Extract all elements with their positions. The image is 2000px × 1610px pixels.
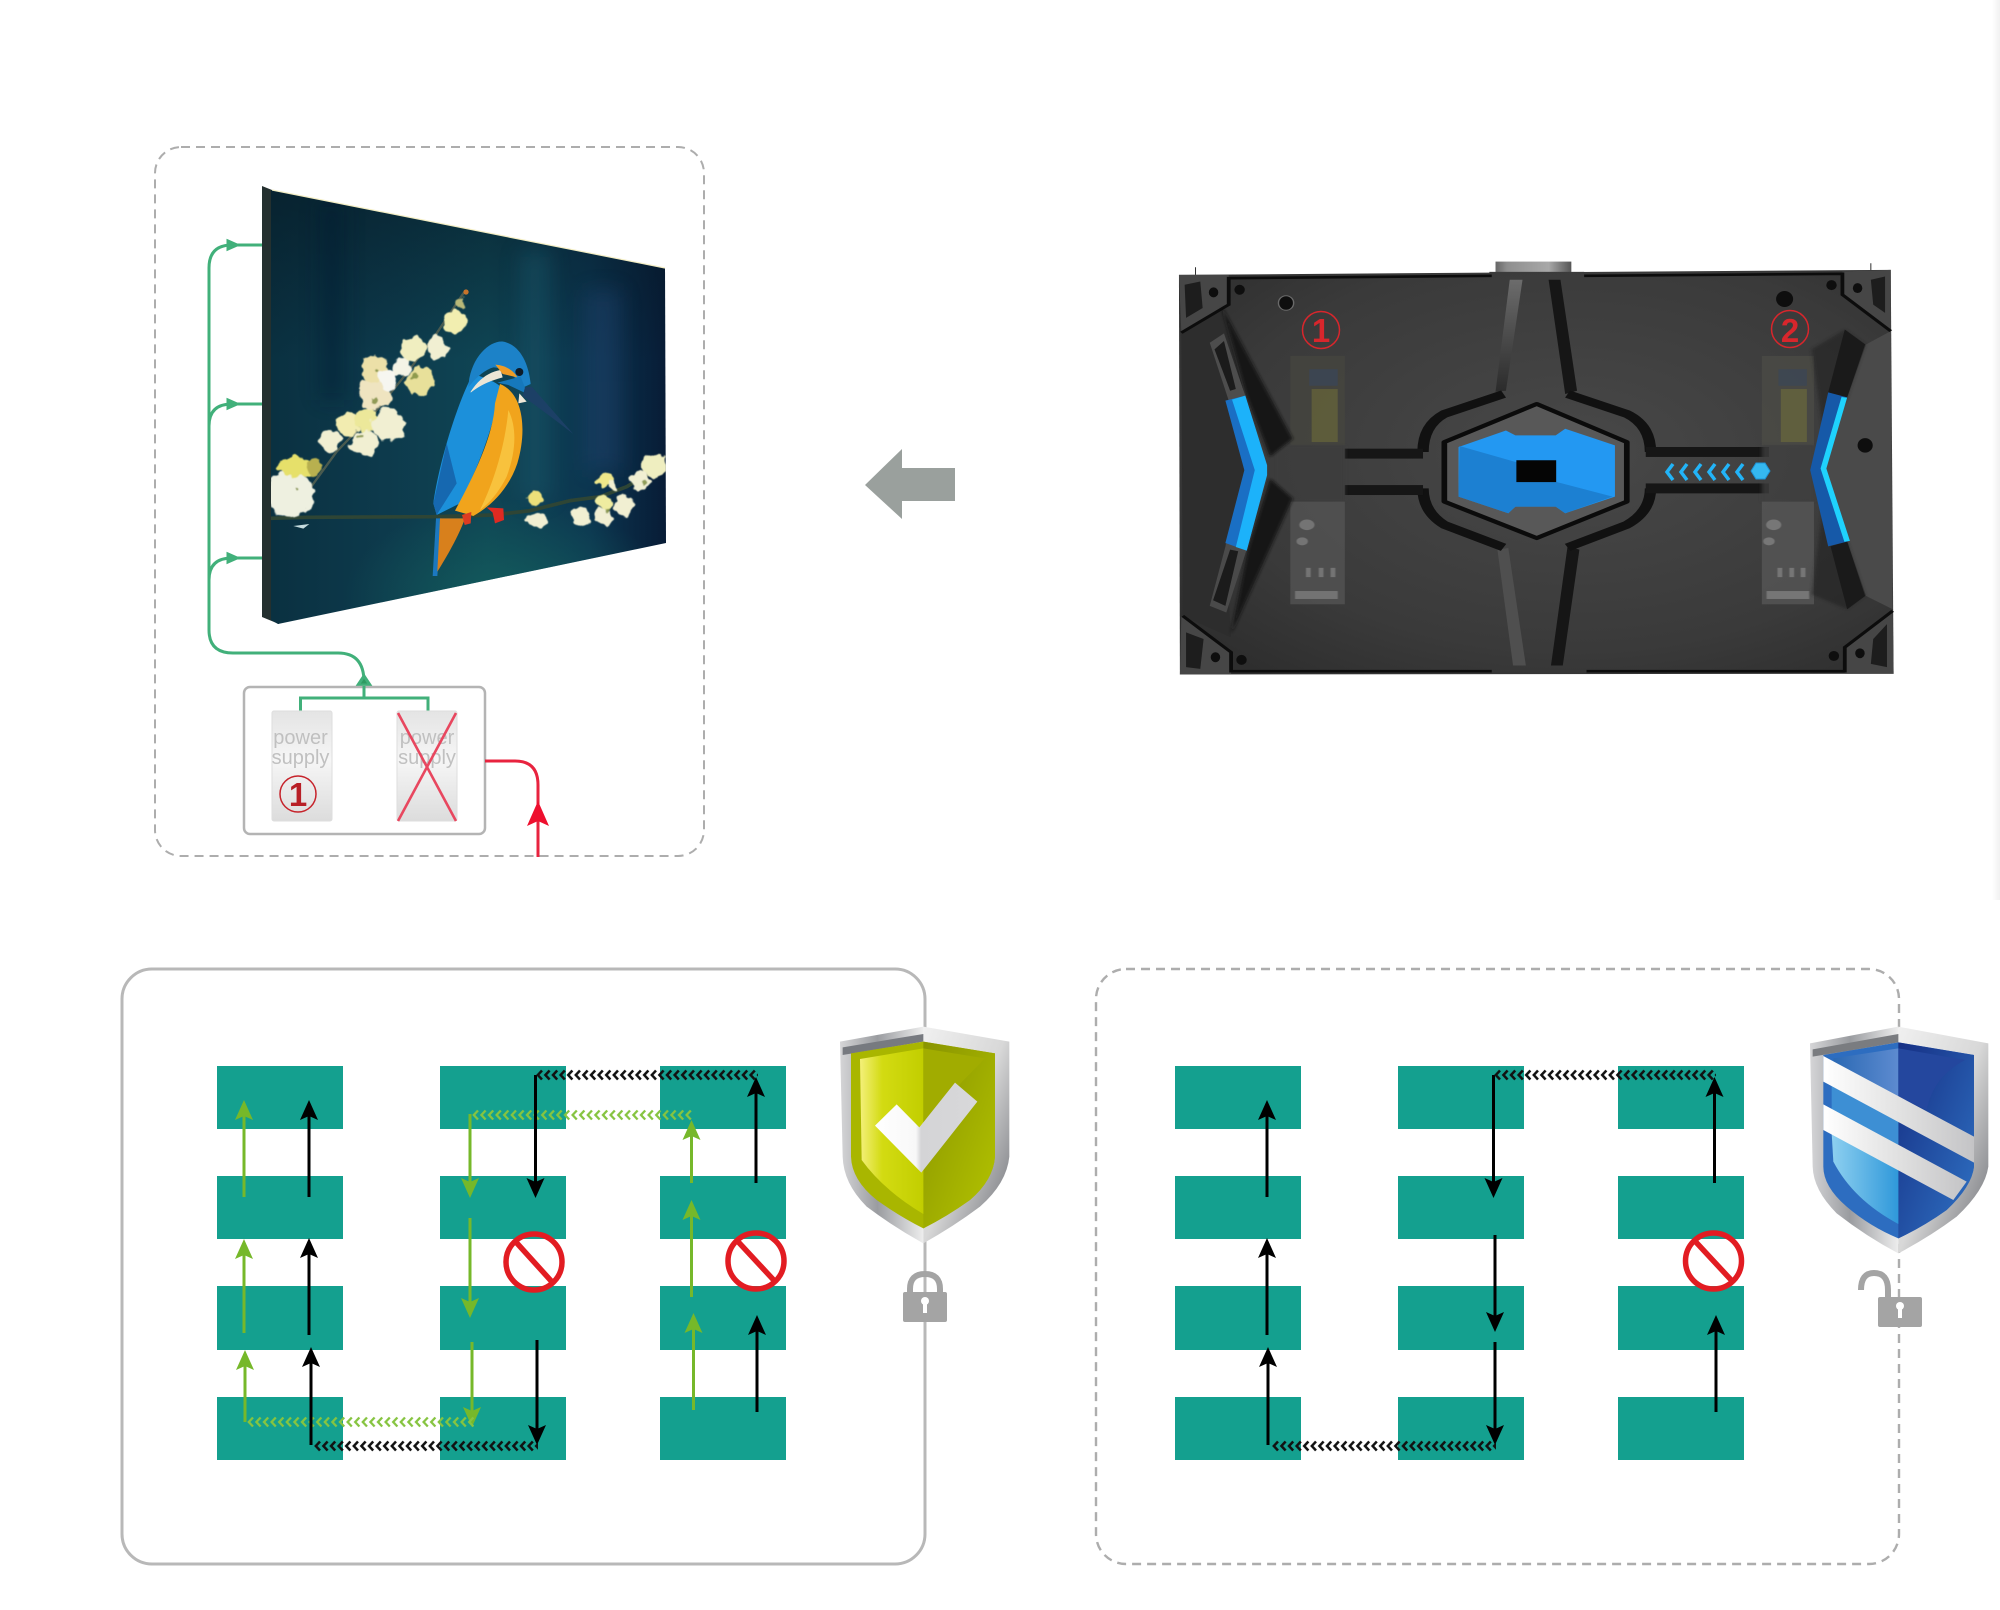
power supply 2, crossed out: supply <box>398 747 456 769</box>
blossoms <box>267 299 667 527</box>
dashed panel border <box>1096 969 1899 1564</box>
LED cabinet rear view <box>1179 262 1894 674</box>
panel: single power supply diagram <box>155 147 704 857</box>
icon: open padlock <box>1861 1273 1922 1327</box>
green bus from power supplies <box>300 686 428 711</box>
frame lines <box>1181 274 1893 671</box>
icon: closed padlock <box>903 1274 947 1322</box>
hexagonal hub <box>1444 404 1627 538</box>
kingfisher bird <box>293 342 573 576</box>
prohibition sign <box>1686 1233 1742 1289</box>
side shading <box>1181 306 1245 637</box>
prohibition sign right <box>728 1233 784 1289</box>
top connector <box>1196 262 1871 280</box>
dual power supply enclosure <box>244 686 485 834</box>
cross ridges <box>1496 280 1579 666</box>
left handle <box>1210 306 1293 634</box>
power supply 1: supply <box>272 747 329 769</box>
teal LED module grid <box>1175 1066 1744 1460</box>
icon: blue stripe shield <box>1810 1027 1988 1253</box>
power supply 1: power <box>273 727 328 749</box>
blue chevron indicators <box>1667 463 1770 480</box>
ghosted power supply left <box>1274 356 1345 604</box>
arrow pointing left <box>865 449 955 519</box>
power supply 2, crossed out <box>397 711 457 821</box>
corner latches <box>1185 276 1887 669</box>
hub outer strokes and rails <box>1423 394 1650 547</box>
red number 2 marker: 2 <box>1781 312 1799 349</box>
power supply 1: 1 <box>289 776 307 813</box>
branches <box>270 293 660 518</box>
corner blocks <box>1179 270 1894 674</box>
black signal path <box>1267 1069 1716 1452</box>
blossom shading <box>294 368 646 510</box>
panel: locked redundant signal diagram <box>122 969 1009 1564</box>
red AC input arrow <box>485 761 549 857</box>
black primary signal path <box>309 1069 758 1452</box>
red number 1 marker: 1 <box>1312 312 1330 349</box>
ghosted power supply right <box>1762 356 1814 604</box>
power supply 2, crossed out: power <box>400 727 455 749</box>
LED screen showing a kingfisher photo <box>262 180 672 630</box>
screws <box>1209 280 1873 665</box>
panel: unlocked signal diagram <box>1096 969 1988 1564</box>
power wiring in green <box>209 241 370 698</box>
red number 1 marker <box>1302 312 1340 349</box>
screen face <box>262 180 672 630</box>
red number 2 marker <box>1772 310 1808 349</box>
enclosure box <box>244 687 485 834</box>
prohibition sign centre <box>506 1234 562 1290</box>
screen side edge <box>262 186 279 624</box>
panel border <box>155 147 704 856</box>
icon: green check shield <box>840 1027 1009 1243</box>
teal LED module grid <box>217 1066 786 1460</box>
right handle <box>1810 329 1865 609</box>
solid panel border <box>122 969 925 1564</box>
green backup signal path <box>244 1105 694 1428</box>
power supply 1 <box>272 711 332 821</box>
cabinet body <box>1179 270 1894 674</box>
kingfisher and blossoms, drawn in local coordinates <box>267 289 667 576</box>
